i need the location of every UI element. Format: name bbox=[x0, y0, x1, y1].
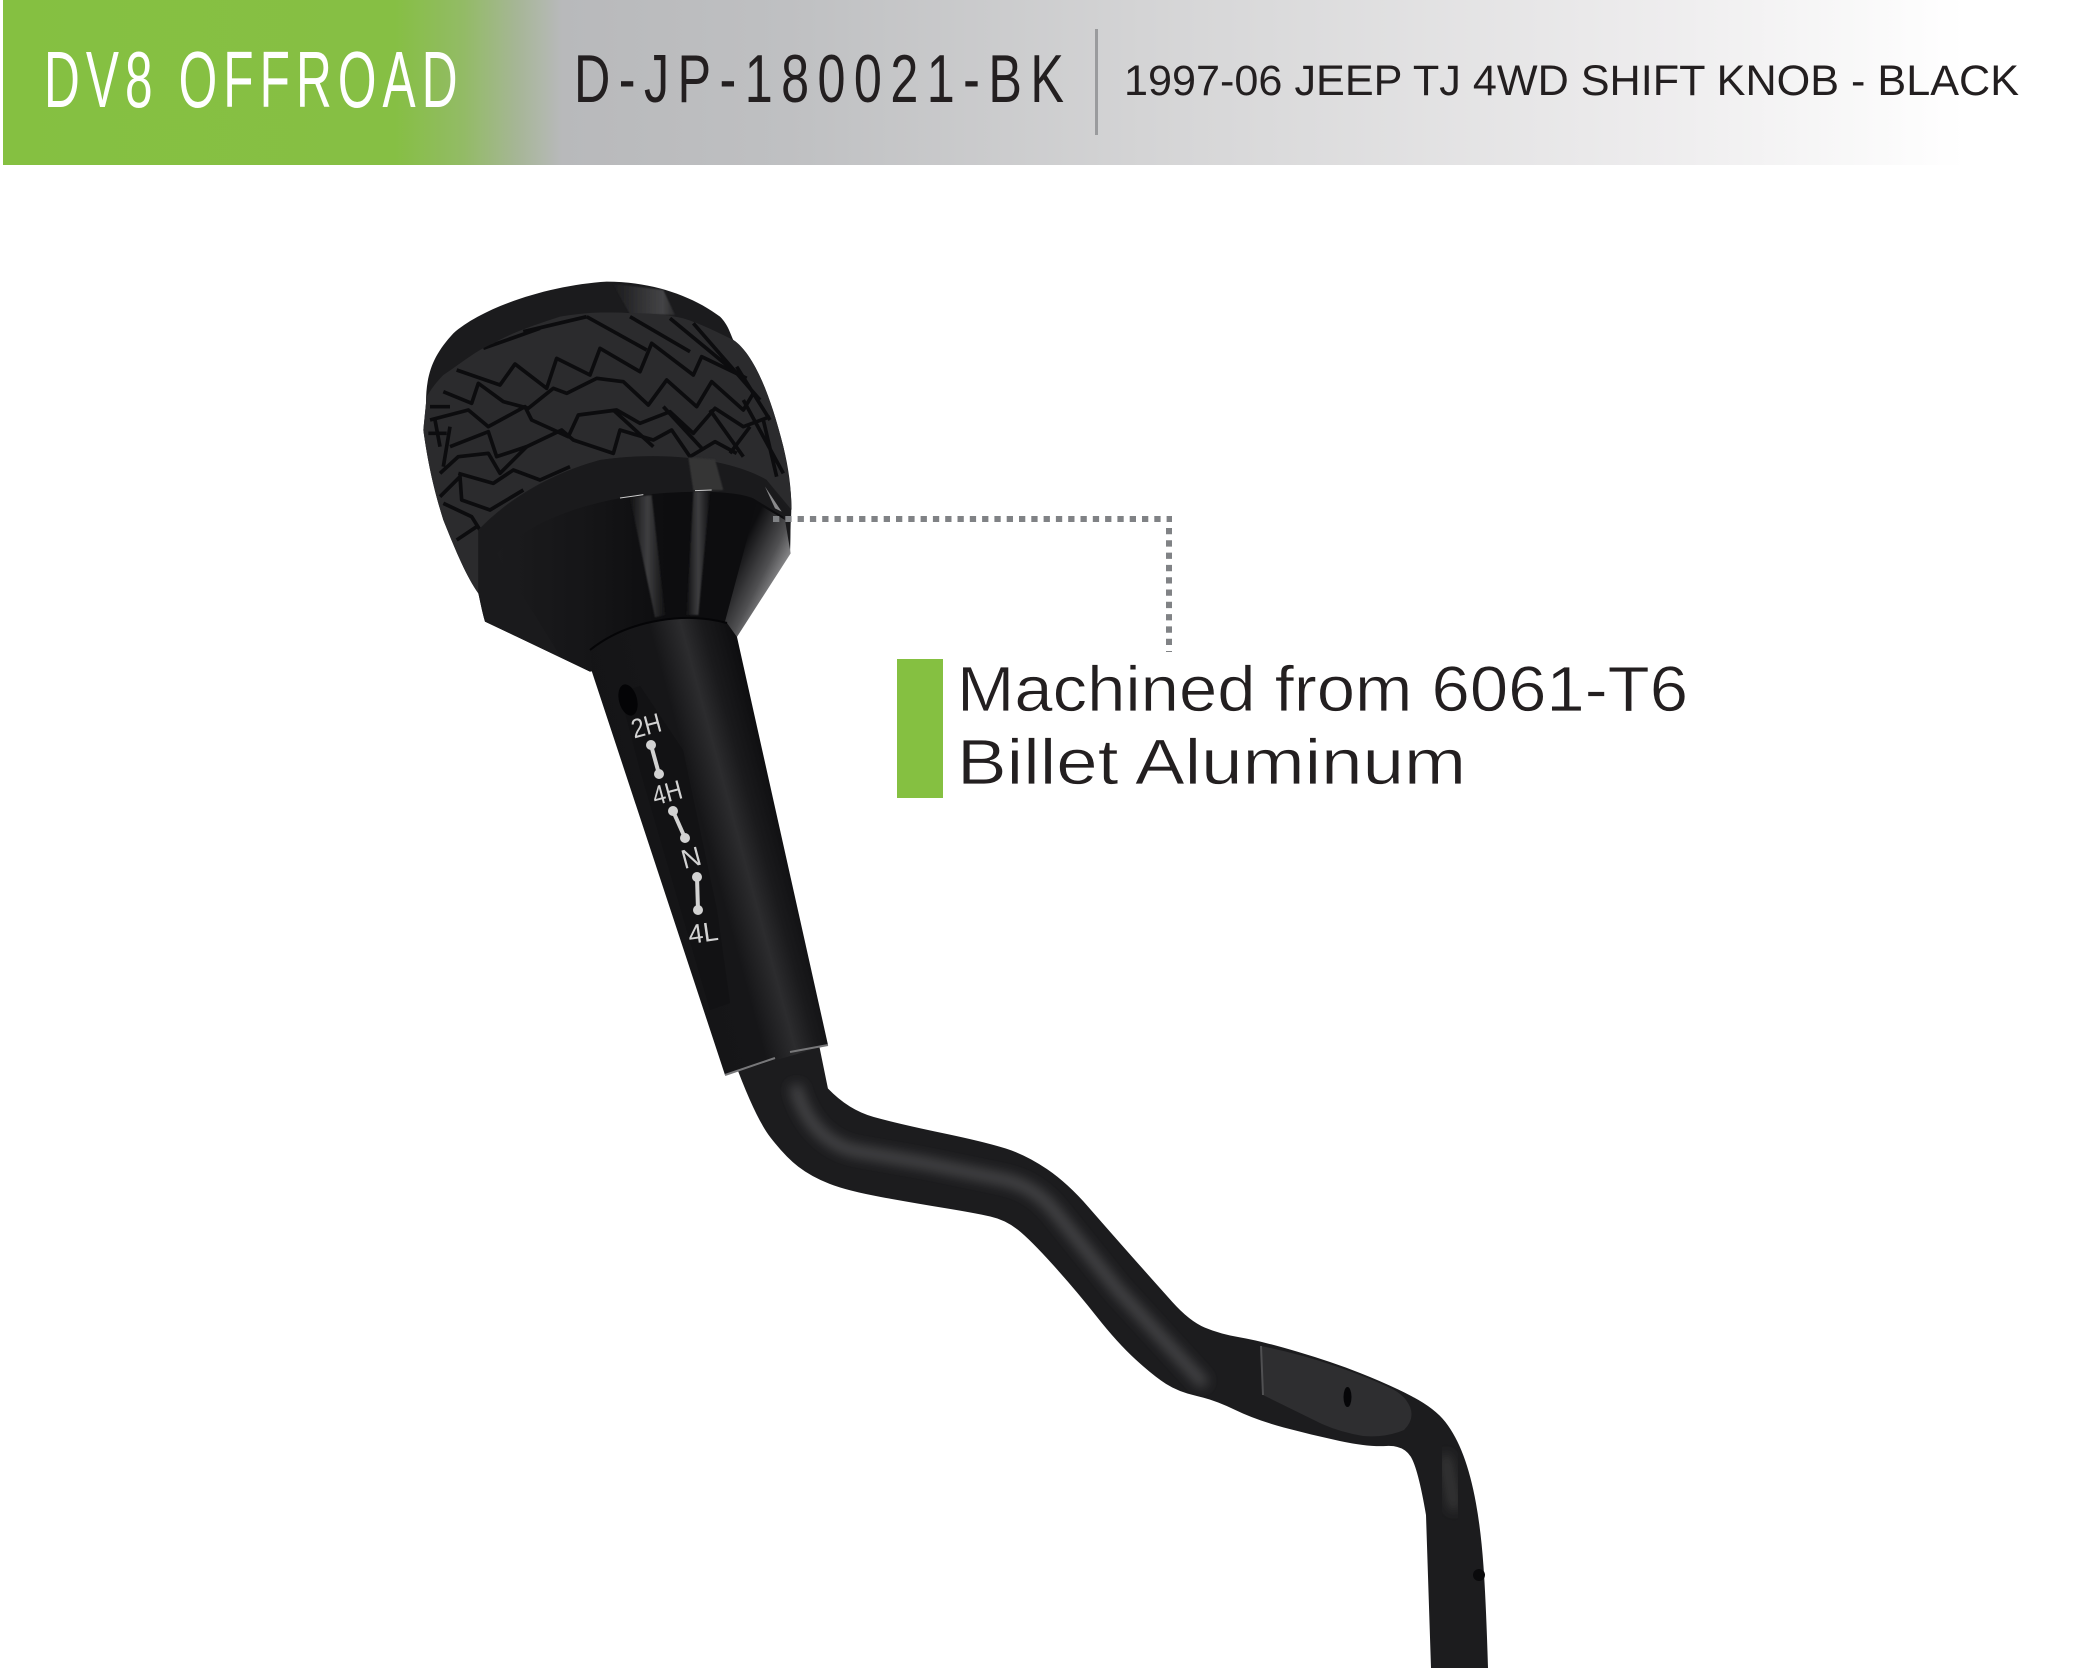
callout green bar bbox=[897, 659, 943, 798]
link N to 4L bbox=[694, 874, 701, 913]
label 2H: 2H bbox=[628, 708, 665, 744]
header banner bbox=[3, 0, 2019, 165]
collar highlight bbox=[688, 457, 723, 491]
label N: N bbox=[678, 841, 705, 875]
machined cone bbox=[497, 492, 790, 672]
bent lever rod bbox=[735, 1040, 1487, 1668]
part number: D-JP-180021-BK bbox=[574, 41, 1064, 117]
flattened section bbox=[1261, 1346, 1412, 1436]
cap highlight bbox=[613, 284, 675, 315]
cone highlights bbox=[630, 495, 665, 617]
knob silhouette bbox=[423, 282, 791, 672]
label 4H: 4H bbox=[649, 775, 686, 811]
callout bbox=[897, 653, 1688, 798]
shaft bottom rim bbox=[725, 1045, 828, 1075]
knob shaft bbox=[590, 618, 828, 1075]
brand name: DV8 OFFROAD bbox=[44, 36, 458, 125]
shaft slot bbox=[615, 682, 641, 718]
callout text: Machined from 6061-T6 bbox=[957, 653, 1688, 725]
shift pattern labels bbox=[628, 708, 720, 950]
label 4L: 4L bbox=[686, 916, 720, 950]
callout text bbox=[957, 653, 1688, 798]
header divider bbox=[1095, 29, 1098, 135]
product title: 1997-06 JEEP TJ 4WD SHIFT KNOB - BLACK bbox=[1124, 57, 2019, 105]
rod holes bbox=[1344, 1387, 1352, 1407]
tread block pattern bbox=[420, 310, 797, 600]
callout text: Billet Aluminum bbox=[957, 726, 1466, 798]
link 4H to N bbox=[670, 808, 688, 841]
link 2H to 4H bbox=[648, 742, 662, 777]
product photo: shifter lever with knob bbox=[420, 282, 1487, 1668]
dotted leader line bbox=[773, 519, 1172, 652]
collar bbox=[478, 456, 791, 672]
flat label area bbox=[620, 686, 730, 1010]
knob head with tread grip bbox=[420, 282, 797, 672]
